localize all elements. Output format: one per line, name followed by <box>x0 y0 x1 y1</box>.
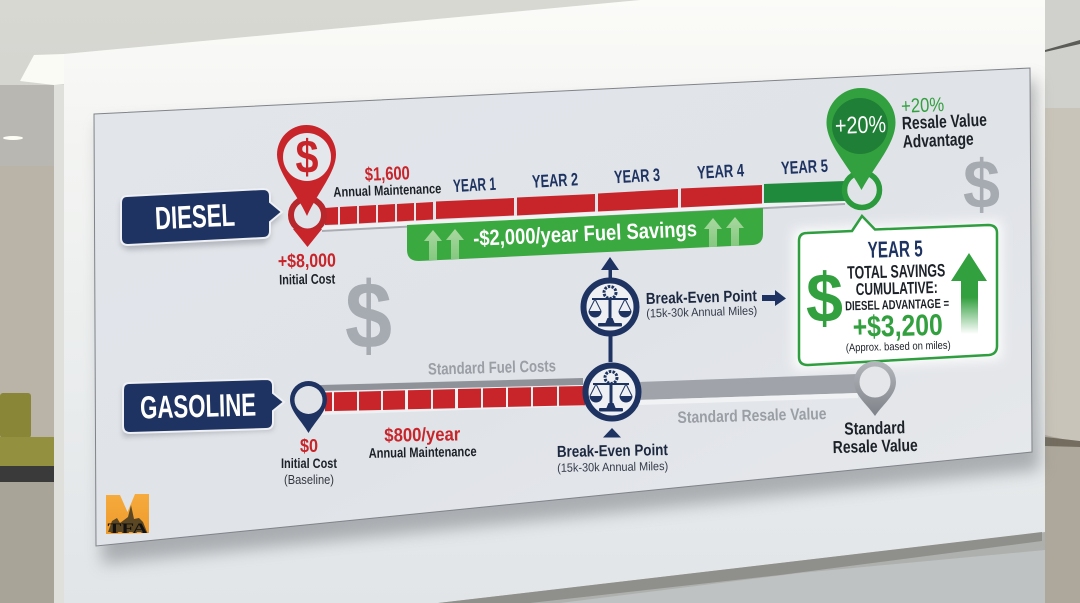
diesel label: DIESEL <box>154 197 236 236</box>
break-even lower text <box>557 442 669 475</box>
year labels <box>453 156 828 196</box>
fuel savings banner: -$2,000/year Fuel Savings <box>473 216 697 251</box>
break-even upper text <box>646 288 758 320</box>
resale green pin: +20% <box>835 111 886 140</box>
resale value advantage text: +20% <box>901 94 945 118</box>
year labels: YEAR 1 <box>453 174 496 196</box>
icon: upper break-even scales <box>584 280 636 334</box>
diesel label <box>121 189 282 250</box>
logo: M TFA <box>106 494 149 537</box>
main sign panel <box>94 68 1032 546</box>
gasoline maintenance text <box>368 424 477 461</box>
break-even lower text: Break-Even Point <box>557 442 669 461</box>
arrow: up to fuel savings <box>601 257 619 278</box>
icon: dollar sign: $ <box>806 259 843 337</box>
resale value advantage text: Resale Value <box>901 110 987 133</box>
diesel initial cost text <box>278 250 336 288</box>
diesel initial cost text: +$8,000 <box>278 250 336 273</box>
gasoline initial pin <box>290 381 327 433</box>
standard resale value text: Standard <box>844 417 906 439</box>
gasoline label <box>123 379 284 437</box>
callout text: YEAR 5 <box>867 235 923 263</box>
fuel savings banner <box>407 208 763 261</box>
gasoline initial cost text: Initial Cost <box>281 455 337 471</box>
panel drop shadow <box>100 80 1040 564</box>
resale value advantage text <box>901 92 988 152</box>
callout text: DIESEL ADVANTAGE = <box>845 296 950 313</box>
year labels: YEAR 5 <box>781 156 828 178</box>
gasoline maintenance text: $800/year <box>384 424 461 447</box>
callout text: TOTAL SAVINGS <box>847 260 945 283</box>
diesel timeline bar <box>322 181 845 232</box>
year labels: YEAR 3 <box>614 165 660 187</box>
diesel initial cost pin <box>277 125 336 247</box>
icon: dollar in pin: $ <box>296 130 318 183</box>
callout text <box>843 235 951 354</box>
icon: lower break-even scales <box>586 366 638 418</box>
maintenance squares <box>325 185 762 225</box>
connector between break-even icons <box>608 336 612 362</box>
icon: up arrows left <box>424 229 464 260</box>
maintenance squares <box>325 386 585 411</box>
gasoline maintenance text: Annual Maintenance <box>368 443 477 461</box>
callout: year 5 total savings <box>799 216 997 365</box>
arrow: up to lower break-even <box>603 428 621 438</box>
logo: M TFA: TFA <box>108 521 148 537</box>
resale green pin <box>826 88 896 208</box>
callout glow <box>794 221 1001 369</box>
gasoline initial cost text: $0 <box>300 436 318 456</box>
decorative dollar sign: left: $ <box>345 263 392 369</box>
year labels: YEAR 2 <box>532 169 579 192</box>
break-even upper text: Break-Even Point <box>646 288 758 308</box>
resale value advantage text: Advantage <box>902 129 974 152</box>
callout text: CUMULATIVE: <box>855 278 938 299</box>
diesel initial cost text: Initial Cost <box>279 271 336 287</box>
standard resale value text <box>832 417 918 457</box>
break-even upper text: (15k-30k Annual Miles) <box>646 304 757 320</box>
icon: up arrow <box>951 253 987 334</box>
gasoline timeline bar <box>320 374 858 415</box>
standard resale value bar label: Standard Resale Value <box>677 405 827 427</box>
decorative dollar sign: right: $ <box>963 146 1000 223</box>
standard resale pin <box>854 361 896 416</box>
standard fuel costs label: Standard Fuel Costs <box>428 357 556 379</box>
diesel maintenance text: Annual Maintenance <box>333 180 442 200</box>
gasoline label: GASOLINE <box>140 386 256 426</box>
year labels: YEAR 4 <box>697 160 745 183</box>
gasoline initial cost text <box>281 436 337 487</box>
icon: up arrows right <box>704 217 744 247</box>
arrow: to callout <box>762 290 786 306</box>
break-even lower text: (15k-30k Annual Miles) <box>557 459 668 475</box>
diesel maintenance text <box>332 162 442 200</box>
callout text: +$3,200 <box>852 309 943 344</box>
diesel maintenance text: $1,600 <box>364 163 410 186</box>
callout text: (Approx. based on miles) <box>846 340 951 354</box>
gasoline initial cost text: (Baseline) <box>284 473 334 487</box>
standard resale value text: Resale Value <box>832 435 918 457</box>
